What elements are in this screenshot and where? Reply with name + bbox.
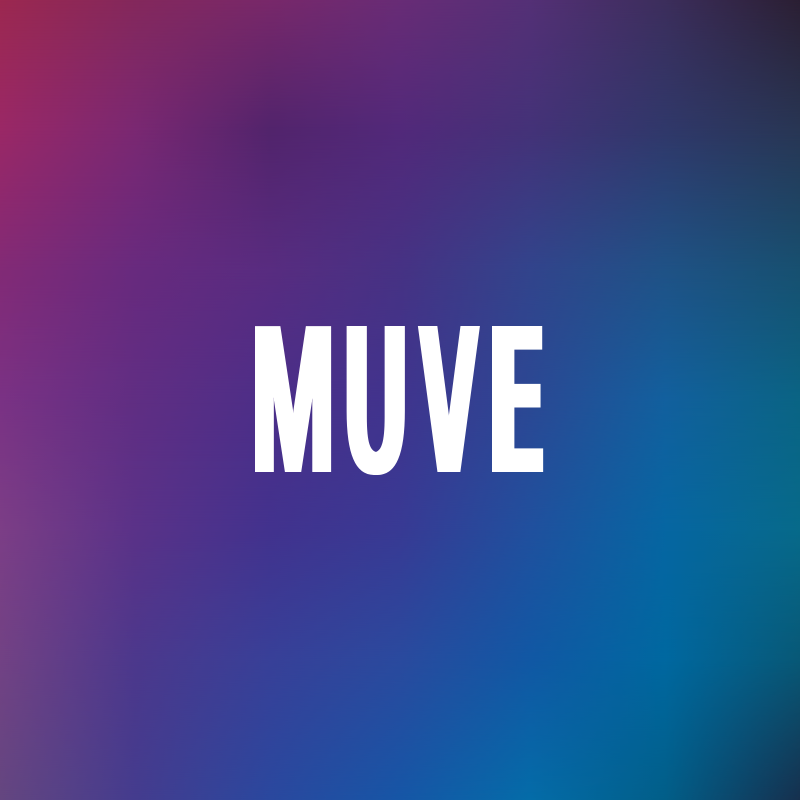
title: MUVE: U xyxy=(341,282,411,525)
title: MUVE: V xyxy=(420,281,478,524)
title: MUVE: E xyxy=(487,282,547,525)
title: MUVE: M xyxy=(251,282,335,518)
title: MUVE xyxy=(251,281,547,525)
